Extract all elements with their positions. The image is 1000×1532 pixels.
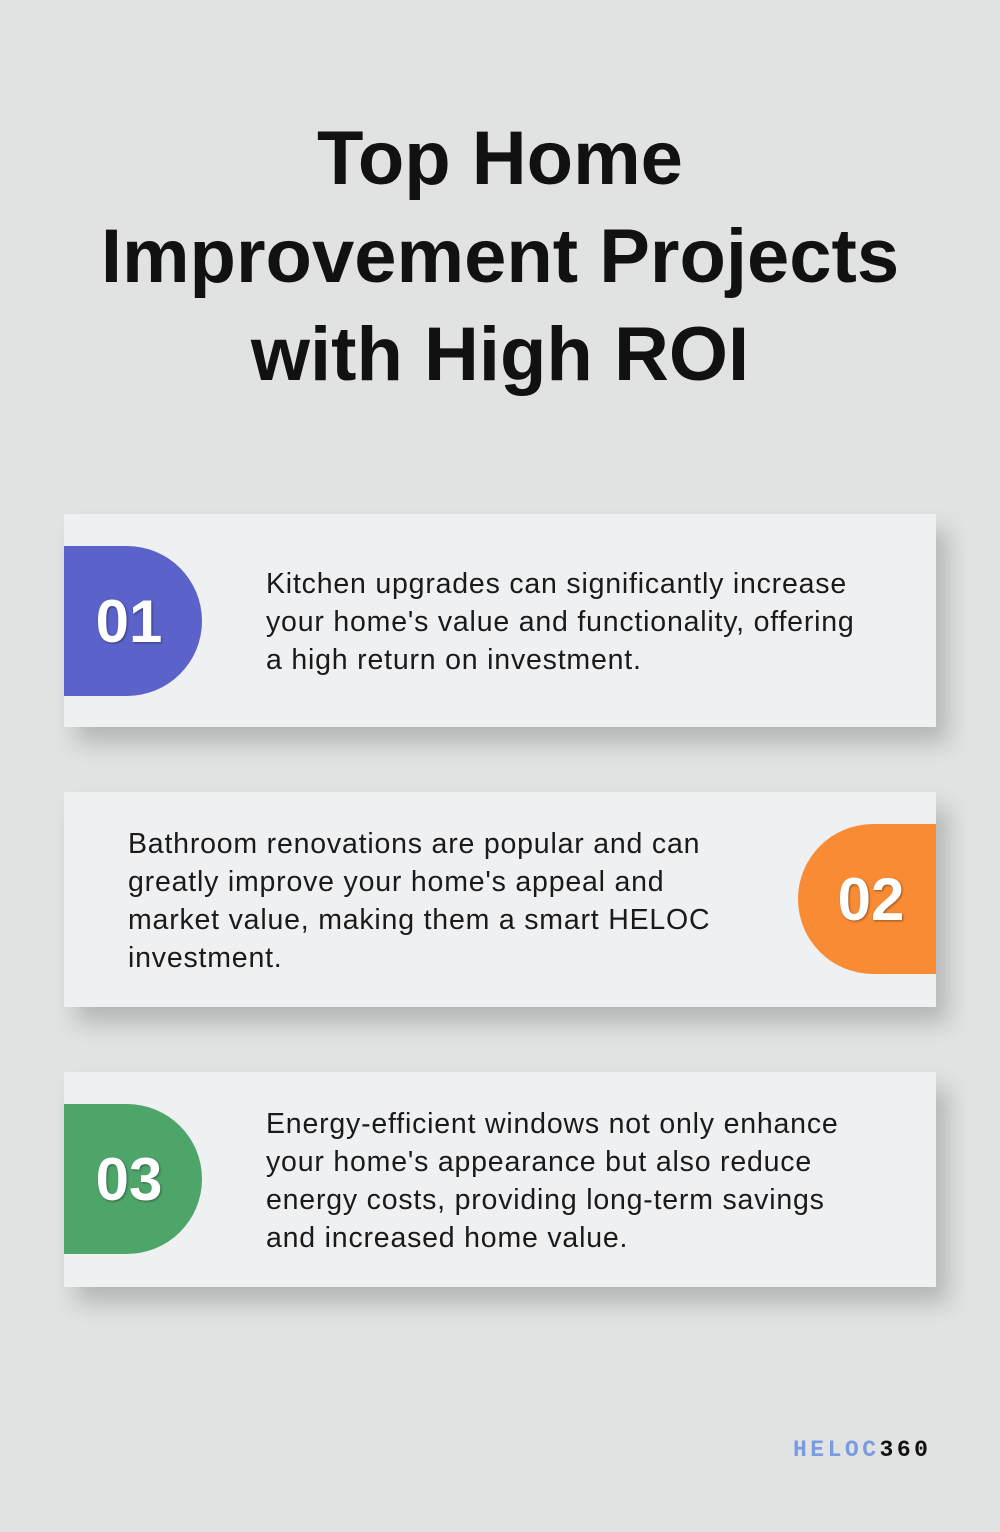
text 02 (128, 828, 710, 974)
badge 03: 03 (96, 1146, 162, 1212)
title (101, 116, 899, 397)
title: Top Home (317, 116, 683, 201)
text 03: and increased home value. (266, 1222, 628, 1254)
badge 01 (64, 546, 202, 696)
text 02: Bathroom renovations are popular and can (128, 828, 700, 860)
badge 03 (64, 1104, 202, 1254)
panel: card 03 (64, 1072, 936, 1287)
text 01 (266, 568, 855, 676)
text 03: Energy-efficient windows not only enhance (266, 1108, 839, 1140)
title: with High ROI (251, 312, 749, 397)
text 01: your home's value and functionality, offering (266, 606, 855, 638)
text 03: energy costs, providing long-term savings (266, 1184, 825, 1216)
badge 02: 02 (838, 866, 904, 932)
text 01: Kitchen upgrades can significantly increase (266, 568, 847, 600)
text 02: investment. (128, 942, 283, 974)
text 03: your home's appearance but also reduce (266, 1146, 812, 1178)
text 02: market value, making them a smart HELOC (128, 904, 710, 936)
text 02: greatly improve your home's appeal and (128, 866, 664, 898)
text 01: a high return on investment. (266, 644, 642, 676)
text 03 (266, 1108, 839, 1254)
panel: card 01 (64, 514, 936, 727)
title: Improvement Projects (101, 214, 899, 299)
logo: HELOC360 (793, 1437, 931, 1463)
badge 02 (798, 824, 936, 974)
panel: card 02 (64, 792, 936, 1007)
badge 01: 01 (96, 588, 162, 654)
